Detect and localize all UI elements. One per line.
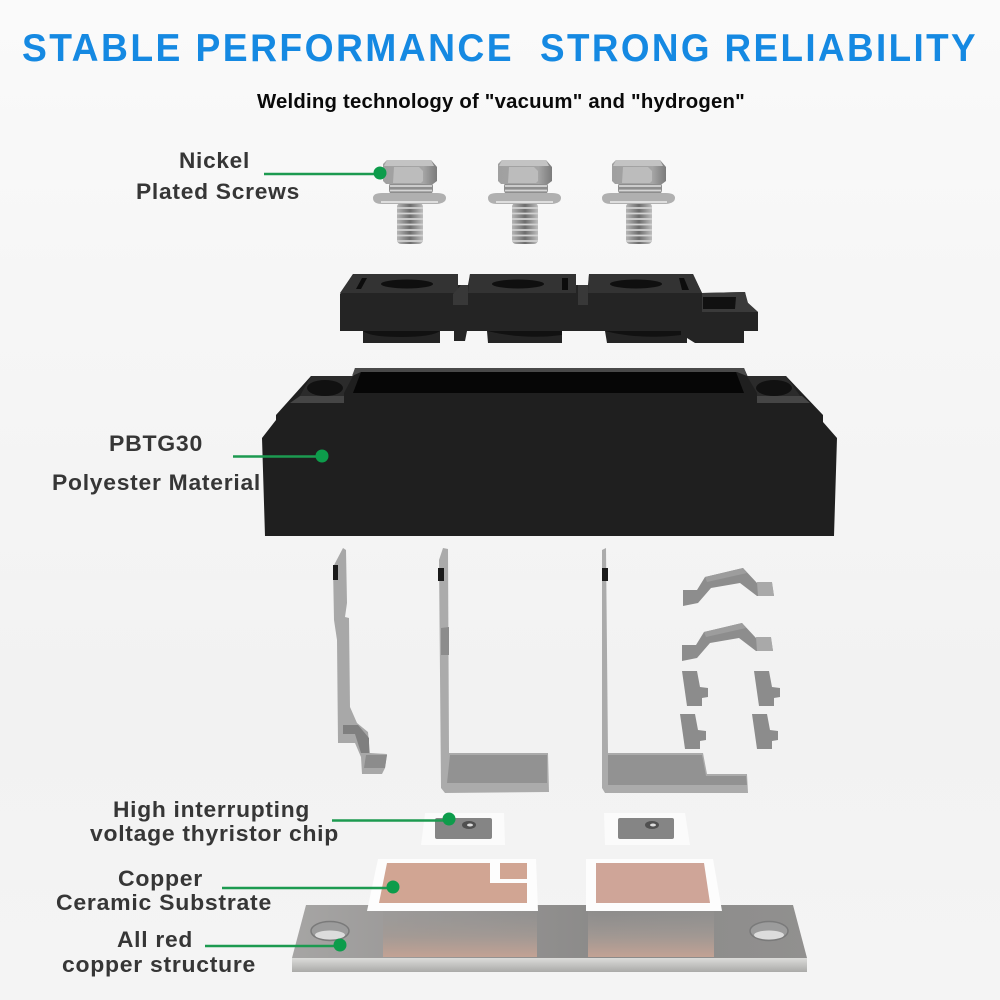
- title: [22, 27, 978, 70]
- callout: all red copper structure: All red: [117, 927, 193, 952]
- callout: copper ceramic substrate: Copper: [118, 866, 203, 891]
- callout: PBTG30 polyester: PBTG30: [109, 431, 203, 456]
- callout: copper ceramic substrate: [56, 866, 400, 915]
- callout: thyristor chip: voltage thyristor chip: [90, 821, 339, 846]
- callout: thyristor chip: [90, 797, 456, 846]
- ceramic substrates with copper: [367, 859, 722, 911]
- title: STABLE PERFORMANCE: [22, 27, 514, 70]
- title: STRONG RELIABILITY: [540, 27, 978, 70]
- callout: nickel plated screws: Nickel: [179, 148, 250, 173]
- callout: nickel plated screws: Plated Screws: [136, 179, 300, 204]
- thyristor chips: [421, 813, 690, 845]
- callout: thyristor chip: High interrupting: [113, 797, 310, 822]
- terminal: right stepped lead: [602, 548, 748, 793]
- lid: black terminal cover: [340, 274, 758, 343]
- icon: nickel plated screws: [373, 160, 675, 244]
- subtitle: Welding technology of "vacuum" and "hydrogen": [257, 91, 745, 113]
- terminal: left bent lead: [333, 548, 387, 774]
- callout: all red copper structure: copper structure: [62, 952, 256, 977]
- callout: PBTG30 polyester: [52, 431, 328, 495]
- small connector clips: [680, 568, 780, 749]
- housing: PBTG30 polyester case: [262, 368, 837, 536]
- callout: PBTG30 polyester: Polyester Material: [52, 470, 261, 495]
- terminal: centre L-shaped lead: [438, 548, 549, 793]
- callout: all red copper structure: [62, 927, 346, 977]
- callout: nickel plated screws: [136, 148, 386, 204]
- copper plated base plate: [292, 905, 807, 972]
- callout: copper ceramic substrate: Ceramic Substrate: [56, 890, 272, 915]
